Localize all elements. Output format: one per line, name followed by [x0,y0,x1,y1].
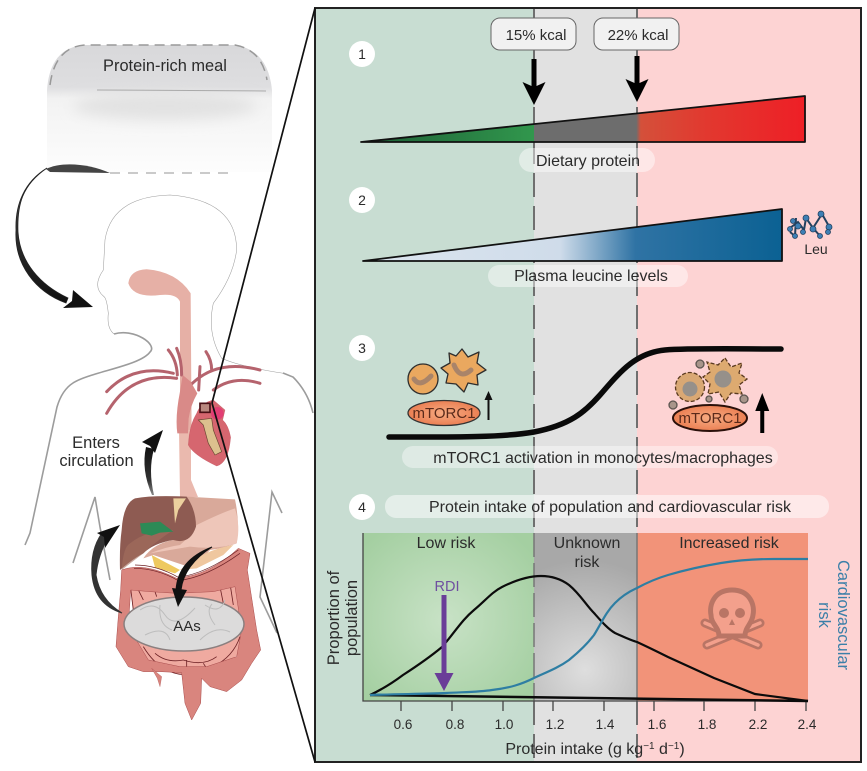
inset marker [200,403,210,412]
x axis tick labels: 1.4 [596,717,615,732]
number badge 4 [349,494,375,520]
number badge 2 [349,187,375,213]
number badge 4: 4 [358,499,366,515]
x axis tick labels: 2.2 [749,717,767,732]
dietary protein label: Dietary protein [536,153,640,170]
callout 22% kcal [594,18,679,50]
callout 22% kcal: 22% kcal [608,27,668,44]
number badge 1: 1 [358,46,366,62]
cardiovascular risk curve [370,559,808,695]
figure: arteries [107,348,260,433]
callout 15% kcal [491,18,576,50]
number badge 3: 3 [358,340,366,356]
zone labels [417,535,780,571]
x axis tick labels: 1.0 [495,717,513,732]
figure: body outline [25,195,313,633]
y axis title [325,570,361,665]
label: enters circulation: Enters [72,434,120,452]
AAs label: AAs [173,618,201,635]
number badge 2: 2 [358,192,366,208]
activation curve [389,349,781,437]
figure: esophagus [128,269,198,497]
icon: skull and crossbones [705,590,760,645]
x axis title: ) [679,741,685,758]
x axis title: d [655,741,668,758]
arrow 15% [522,59,546,105]
dietary protein label [519,148,655,172]
arrow: meal to mouth [16,164,110,308]
mTORC1 low [408,400,480,426]
dietary protein wedge [361,96,805,142]
x axis title: −1 [668,741,680,752]
arrow: enters circulation [142,430,163,495]
axes [363,533,808,711]
label: enters circulation [59,434,134,470]
panel 4: population and risk chart [325,494,852,758]
figure: amino acids pool [124,597,244,651]
x axis tick labels: 0.6 [394,717,412,732]
x axis tick labels: 1.2 [546,717,564,732]
arrow: RDI [434,579,459,691]
secondary axis title: risk [815,602,833,629]
chart heading: Protein intake of population and cardiovascular risk [429,499,792,516]
population curve [370,576,808,701]
x axis title: −1 [643,741,655,752]
leucine wedge [363,209,782,261]
activation label: mTORC1 activation in monocytes/macrophages [433,450,773,467]
arrow: stomach to AAs [172,547,212,607]
panel 1: dietary protein [349,18,805,172]
panel 3: mTORC1 activation [349,335,781,468]
zone labels: Low risk [417,535,476,552]
icon: leucine molecule [788,211,832,238]
zone labels: risk [575,554,600,571]
activation label [402,446,778,468]
plasma leucine label: Plasma leucine levels [514,268,668,285]
arrow: large increase [755,393,769,433]
x axis tick labels: 0.8 [446,717,464,732]
panel 2: plasma leucine [349,187,832,287]
risk zones [363,533,808,701]
zone labels: Increased risk [679,535,780,552]
label: enters circulation: circulation [59,452,134,470]
arrow: RDI: RDI [435,579,459,595]
zone labels: Unknown [554,535,620,552]
arrow: small increase [484,391,492,420]
number badge 3 [349,335,375,361]
x axis tick labels: 1.8 [698,717,716,732]
y axis title: population [343,580,361,656]
mTORC1 high: mTORC1 [678,410,742,427]
arrow: AAs to liver [92,525,122,613]
icon: monocyte and macrophage [408,349,486,394]
panel: zoomed pathway background [315,8,861,762]
x axis tick labels: 1.6 [648,717,666,732]
icon: activated cells [669,358,748,409]
callout 15% kcal: 15% kcal [506,27,566,44]
zoom lines [212,8,315,762]
figure: digestive organs [116,496,261,720]
large intestine [116,548,261,720]
chart heading [385,495,829,518]
y axis title: Proportion of [325,570,343,665]
arrow 22% [626,56,648,102]
figure: heart [188,400,231,466]
meal label: Protein-rich meal [103,57,227,75]
number badge 1 [349,41,375,67]
mTORC1 high [673,405,747,431]
panel: protein-rich meal [47,45,272,173]
Leu label: Leu [804,241,828,257]
x axis tick labels [394,717,817,732]
secondary axis title: Cardiovascular [834,560,852,671]
x axis tick labels: 2.4 [798,717,817,732]
small intestine [130,575,242,675]
secondary axis title [815,560,852,671]
plasma leucine label [488,265,688,287]
mTORC1 low: mTORC1 [412,405,476,422]
x axis title: Protein intake (g kg [505,741,643,758]
